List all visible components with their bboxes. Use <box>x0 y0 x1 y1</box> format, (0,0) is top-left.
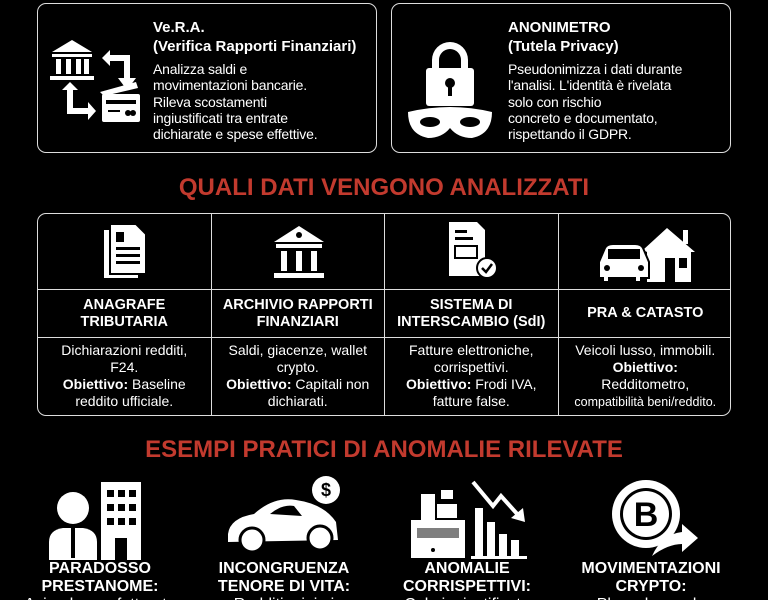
example: prestanome <box>24 482 176 600</box>
icon: lock and mask <box>408 42 492 138</box>
column: anagrafe <box>38 214 212 417</box>
icon: old man and building <box>49 482 141 560</box>
body: archivio: crypto. <box>277 359 319 375</box>
panel: Ve.R.A. <box>37 3 377 153</box>
label: corrispettivi: ANOMALIE <box>424 560 510 577</box>
body: pra: Obiettivo: <box>613 359 678 375</box>
text: Ve.R.A. description: dichiarate e spese effettive. <box>153 126 317 142</box>
body: sdi: fatture false. <box>433 393 510 409</box>
text: Anonimetro description: rispettando il GDPR. <box>508 126 632 142</box>
text: Ve.R.A. description: movimentazioni bancarie. <box>153 77 307 93</box>
text: Anonimetro description: concreto e documentato, <box>508 110 658 126</box>
header: anagrafe: ANAGRAFE <box>83 296 165 312</box>
text: Anonimetro description: solo con rischio <box>508 94 601 110</box>
body: pra: Redditometro, <box>601 376 689 392</box>
heading: Anonimetro: ANONIMETRO <box>508 19 610 36</box>
header: anagrafe: TRIBUTARIA <box>80 314 168 330</box>
header: pra <box>558 290 732 338</box>
panel: Anonimetro <box>391 3 731 153</box>
example: corrispettivi <box>403 480 531 600</box>
column: sdi <box>385 214 558 417</box>
column: pra <box>559 228 730 409</box>
body: archivio: Obiettivo: Capitali non <box>226 376 369 392</box>
text: Ve.R.A. description <box>153 61 317 142</box>
body: sdi: Fatture elettroniche, <box>409 342 534 358</box>
icon: bitcoin <box>612 480 698 556</box>
header: archivio: ARCHIVIO RAPPORTI <box>223 296 373 312</box>
body: sdi: Obiettivo: Frodi IVA, <box>406 376 536 392</box>
label: corrispettivi <box>403 560 531 600</box>
table: data sources <box>37 213 731 416</box>
icon: bank <box>212 214 384 290</box>
header: sdi: INTERSCAMBIO (SdI) <box>397 314 545 330</box>
label: corrispettivi: CORRISPETTIVI: <box>403 578 531 595</box>
body: pra: Veicoli lusso, immobili. <box>575 342 715 358</box>
label: crypto <box>581 560 721 600</box>
header: sdi: SISTEMA DI <box>430 296 512 312</box>
body: sdi <box>406 342 536 409</box>
label: tenore <box>218 560 350 600</box>
header: pra: PRA & CATASTO <box>587 305 703 321</box>
icon: sports car and dollar <box>228 476 340 550</box>
icon: bank and card exchange <box>50 40 140 122</box>
body: pra: compatibilità beni/reddito. <box>574 395 716 409</box>
body: sdi: corrispettivi. <box>434 359 509 375</box>
label: tenore: TENORE DI VITA: <box>218 578 350 595</box>
label: crypto: CRYPTO: <box>615 578 687 595</box>
example: crypto <box>581 480 721 600</box>
body: anagrafe: Obiettivo: Baseline <box>63 376 186 392</box>
text: Anonimetro description: l'analisi. L'identità è rivelata <box>508 77 671 93</box>
example: tenore di vita <box>218 476 350 600</box>
body: anagrafe: reddito ufficiale. <box>75 393 173 409</box>
header: sdi <box>385 290 558 338</box>
heading: Ve.R.A. <box>153 19 356 55</box>
icon: cash register and chart <box>411 480 527 559</box>
body: archivio: dichiarati. <box>268 393 328 409</box>
column: archivio <box>212 214 385 417</box>
body: anagrafe <box>61 342 187 409</box>
label: prestanome: PRESTANOME: <box>41 578 159 595</box>
header: anagrafe <box>38 290 210 338</box>
icon: document <box>38 214 210 290</box>
body: anagrafe: Dichiarazioni redditi, <box>61 342 187 358</box>
icon: sports car and dollar: $ <box>321 480 331 500</box>
heading: quali dati: QUALI DATI VENGONO ANALIZZATI <box>179 174 589 201</box>
body: archivio <box>226 342 369 409</box>
icon: invoice <box>385 214 558 290</box>
body: anagrafe: F24. <box>110 359 138 375</box>
text: Anonimetro description <box>508 61 682 142</box>
icon: car and house <box>558 214 732 290</box>
label: crypto: MOVIMENTAZIONI <box>581 560 721 577</box>
icon: bitcoin: B <box>634 496 658 534</box>
label: prestanome: PARADOSSO <box>49 560 151 577</box>
heading: Anonimetro: (Tutela Privacy) <box>508 38 619 55</box>
text: Anonimetro description: Pseudonimizza i dati durante <box>508 61 682 77</box>
text: Ve.R.A. description: Rileva scostamenti <box>153 94 267 110</box>
text: Ve.R.A. description: Analizza saldi e <box>153 61 247 77</box>
heading: Anonimetro <box>508 19 619 55</box>
header: archivio <box>212 290 384 338</box>
label: tenore: INCONGRUENZA <box>219 560 349 577</box>
text: Ve.R.A. description: ingiustificati tra entrate <box>153 110 288 126</box>
label: prestanome <box>24 560 176 600</box>
heading: Ve.R.A.: (Verifica Rapporti Finanziari) <box>153 38 356 55</box>
heading: esempi: ESEMPI PRATICI DI ANOMALIE RILEVATE <box>145 436 623 463</box>
body: archivio: Saldi, giacenze, wallet <box>228 342 367 358</box>
heading: Ve.R.A.: Ve.R.A. <box>153 19 205 36</box>
header: archivio: FINANZIARI <box>257 314 339 330</box>
body: pra <box>574 342 716 409</box>
